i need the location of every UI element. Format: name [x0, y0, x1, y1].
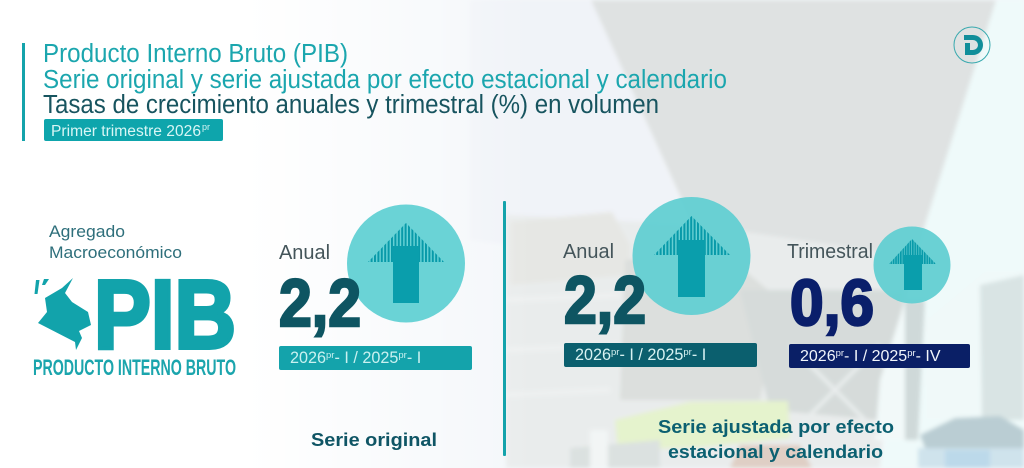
caption: Serie ajustada: Serie ajustada por efecto	[658, 416, 894, 437]
icon: up arrow in circle	[874, 226, 950, 304]
period bar: 2026	[290, 349, 326, 367]
title block	[22, 40, 727, 141]
label: Agregado Macroeconómico: Macroeconómico	[49, 243, 182, 262]
period bar	[279, 346, 472, 370]
period bar: pr	[398, 350, 407, 361]
divider	[503, 201, 506, 456]
period bar: - I / 2025	[619, 346, 683, 364]
period bar: - I / 2025	[844, 348, 907, 365]
panel: serie original anual	[279, 204, 472, 370]
label: Agregado Macroeconómico: Agregado	[49, 222, 125, 241]
period bar: pr	[907, 348, 916, 359]
period bar	[789, 344, 970, 368]
period bar: - I / 2025	[334, 349, 398, 367]
period badge	[44, 119, 223, 141]
period bar: pr	[611, 347, 619, 358]
value: 0,6: 0,6	[790, 266, 874, 339]
logo: PIB with Colombia map	[33, 260, 236, 380]
value: 2,2: 2,2	[279, 266, 361, 341]
value: 2,2: 2,2	[564, 263, 646, 338]
period bar: 2026	[800, 348, 836, 365]
label: Trimestral: Trimestral	[787, 241, 873, 263]
label: Anual: Anual	[563, 241, 614, 263]
period bar: pr	[836, 348, 844, 359]
icon: up arrow in circle	[347, 204, 465, 322]
PIB letters: PIB	[94, 260, 236, 369]
caption: Serie ajustada	[658, 416, 894, 462]
caption: Serie ajustada: estacional y calendario	[668, 441, 883, 462]
panel: serie ajustada trimestral	[787, 226, 970, 368]
logo: D circle	[954, 27, 990, 63]
logo caption: PRODUCTO INTERNO BRUTO	[33, 355, 236, 380]
period badge: pr	[202, 122, 210, 132]
period bar	[564, 343, 757, 367]
period bar: - IV	[916, 348, 941, 365]
period badge: Primer trimestre 2026	[51, 123, 201, 140]
label: Anual: Anual	[279, 242, 330, 264]
caption: Serie original: Serie original	[311, 429, 437, 450]
icon: Colombia map	[34, 278, 91, 350]
title line 3: Tasas de crecimiento anuales y trimestral (%) en volumen	[43, 91, 659, 119]
period bar: - I	[407, 349, 421, 367]
period bar: 2026	[575, 346, 611, 364]
label: Agregado Macroeconómico	[49, 222, 182, 262]
period bar: - I	[692, 346, 706, 364]
title accent bar	[22, 43, 25, 141]
title line 2: Serie original y serie ajustada por efecto estacional y calendario	[43, 66, 727, 94]
panel: serie ajustada anual	[563, 197, 757, 367]
period bar: pr	[326, 350, 334, 361]
title line 1: Producto Interno Bruto (PIB)	[43, 40, 348, 68]
period bar: pr	[683, 347, 692, 358]
icon: up arrow in circle	[632, 197, 750, 315]
